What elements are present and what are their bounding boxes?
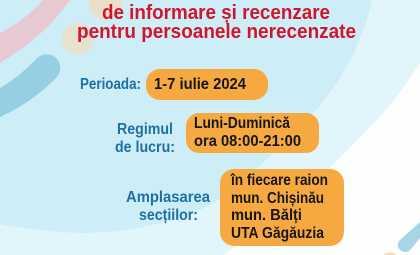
pill: working hours bbox=[186, 113, 319, 153]
label: Amplasarea secțiilor: secțiilor: bbox=[139, 207, 198, 224]
pill: locations: mun. Chișinău bbox=[231, 190, 324, 207]
decorative blue stroke bottom right bbox=[398, 222, 420, 252]
label: Amplasarea secțiilor: Amplasarea bbox=[126, 189, 210, 206]
heading: pentru persoanele nerecenzate bbox=[77, 20, 356, 43]
pill: period bbox=[146, 69, 268, 100]
pill: working hours: ora 08:00-21:00 bbox=[194, 133, 301, 150]
label: Regimul de lucru: de lucru: bbox=[115, 139, 175, 156]
pill: locations: mun. Bălți bbox=[231, 207, 302, 224]
pill: period: 1-7 iulie 2024 bbox=[154, 76, 246, 93]
label: Regimul de lucru: Regimul bbox=[117, 121, 173, 138]
pill: locations bbox=[220, 169, 344, 246]
heading: de informare și recenzare bbox=[102, 1, 330, 24]
decorative peach circle bbox=[383, 252, 397, 255]
decorative pink arc bbox=[0, 0, 70, 63]
decorative blue arc bbox=[0, 54, 60, 117]
decorative beige circle bbox=[62, 23, 94, 55]
heading bbox=[77, 1, 356, 43]
label: Amplasarea secțiilor bbox=[126, 189, 210, 224]
label: Perioada: Perioada: bbox=[80, 76, 141, 93]
label: Regimul de lucru bbox=[115, 121, 175, 156]
decorative beige circle top bbox=[89, 0, 122, 20]
pill: working hours: Luni-Duminică bbox=[194, 115, 290, 132]
pill: locations: UTA Găgăuzia bbox=[231, 225, 324, 242]
pill: locations: în fiecare raion bbox=[230, 172, 328, 189]
